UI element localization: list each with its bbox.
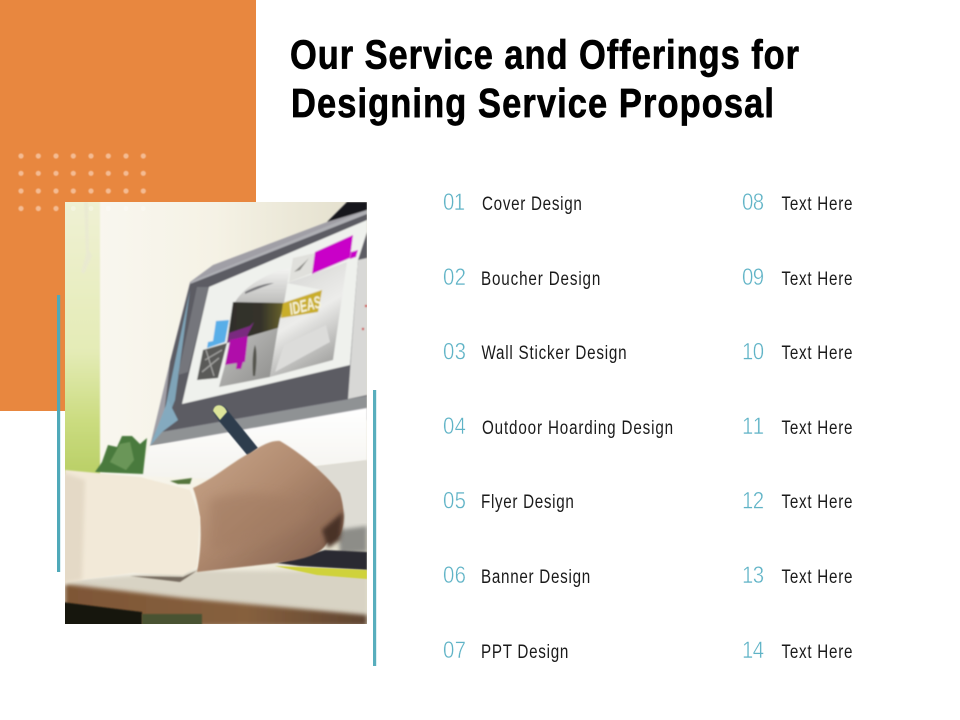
item 05: Flyer Design <box>481 490 574 512</box>
item 02: Boucher Design <box>481 267 600 289</box>
left teal accent bar <box>57 295 60 572</box>
item 07: 07 <box>443 636 466 663</box>
item 02 <box>443 263 600 290</box>
item 03: Wall Sticker Design <box>482 341 627 363</box>
desk <box>65 569 366 614</box>
item 09: 09 <box>742 263 764 290</box>
item 06: Banner Design <box>481 565 590 587</box>
right teal accent bar <box>373 390 376 666</box>
item 12 <box>742 487 852 514</box>
item 11 <box>742 412 852 439</box>
item 06: 06 <box>443 561 466 588</box>
item 07: PPT Design <box>481 640 568 662</box>
blurred bezel top edge <box>150 202 367 446</box>
item 11: Text Here <box>782 416 852 438</box>
blue block <box>207 320 229 348</box>
tree sketch <box>197 343 227 380</box>
shirt sleeve <box>65 470 200 582</box>
canvas <box>182 220 367 404</box>
toolbar <box>178 287 209 375</box>
hand <box>193 441 344 572</box>
item 01: Cover Design <box>482 192 582 214</box>
title: Designing Service Proposal <box>291 81 774 127</box>
item 01: 01 <box>443 188 465 215</box>
orange background panel <box>0 0 256 411</box>
item 14: Text Here <box>782 640 852 662</box>
item 13: 13 <box>742 561 764 588</box>
sky photo <box>235 276 288 304</box>
services list: column one <box>443 188 673 663</box>
dark landscape <box>227 302 284 343</box>
item 02: 02 <box>443 263 466 290</box>
item 10: 10 <box>742 338 764 365</box>
item 09 <box>742 263 852 290</box>
bottom grey photo <box>219 328 278 387</box>
right side panel <box>348 258 367 399</box>
grey wall behind hand <box>316 460 366 524</box>
tablet <box>277 550 367 570</box>
plant <box>95 436 192 484</box>
item 08 <box>742 188 852 215</box>
title: Our Service and Offerings for <box>290 33 799 78</box>
magenta lower block <box>225 336 248 365</box>
item 05 <box>443 487 574 514</box>
item 12: 12 <box>742 487 764 514</box>
item 08: Text Here <box>782 192 852 214</box>
item 03: 03 <box>443 338 466 365</box>
item 14: 14 <box>742 636 764 663</box>
item 01 <box>443 188 582 215</box>
faded dots over photo <box>71 206 146 211</box>
monitor base <box>140 408 367 480</box>
item 07 <box>443 636 568 663</box>
item 10 <box>742 338 852 365</box>
item 08: 08 <box>742 188 764 215</box>
item 04: 04 <box>443 412 466 439</box>
stylus <box>213 405 258 456</box>
item 06 <box>443 561 590 588</box>
dark bezel <box>162 214 367 432</box>
item 12: Text Here <box>782 490 852 512</box>
item 10: Text Here <box>782 341 852 363</box>
magenta top block <box>312 235 353 274</box>
sketch photo <box>289 253 315 282</box>
item 11: 11 <box>742 412 764 439</box>
yellow block <box>281 290 322 318</box>
item 03 <box>443 338 627 365</box>
item 05: 05 <box>443 487 466 514</box>
room photo <box>270 262 347 377</box>
title <box>290 33 799 127</box>
item 04 <box>443 412 673 439</box>
item 04: Outdoor Hoarding Design <box>482 416 673 438</box>
item 09: Text Here <box>782 267 852 289</box>
label on screen: IDEAS <box>287 292 324 318</box>
monitor <box>150 202 367 446</box>
item 13: Text Here <box>782 565 852 587</box>
dot grid decoration <box>18 153 146 211</box>
photo: designer drawing at monitor <box>62 200 367 628</box>
services list: column two <box>742 188 852 663</box>
item 13 <box>742 561 852 588</box>
item 14 <box>742 636 852 663</box>
